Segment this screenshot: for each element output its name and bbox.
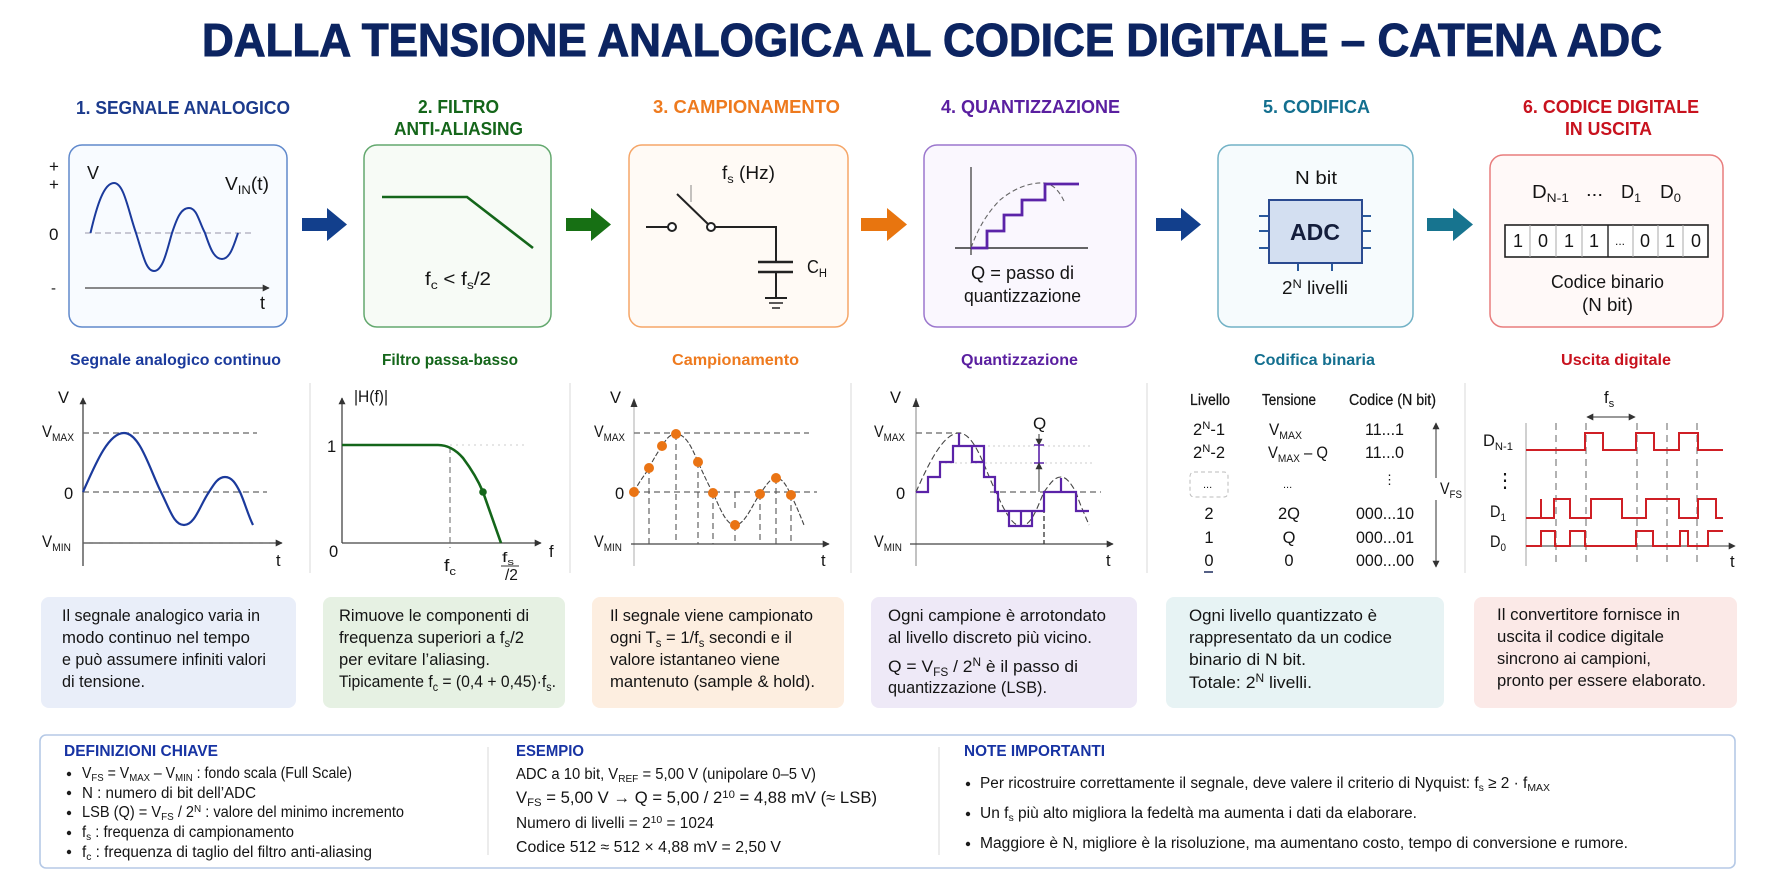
key definitions: f [82,824,86,841]
description box 1: e può assumere infiniti valori [62,650,266,669]
heading: step 2 [394,97,523,139]
key definitions: : frequenza di campionamento [91,824,294,841]
key definitions: – V [150,765,176,782]
panel: analog signal: (t) [251,174,269,194]
description box 1: di tensione. [62,672,145,691]
table: binary coding: -1 [1210,421,1225,439]
description box 4: Q = V [888,657,932,676]
chart: digital output timing: ⋮ [1495,470,1515,492]
table: binary coding [1190,392,1464,572]
chart: continuous analog signal: V [42,533,53,551]
description box 5 [1166,597,1444,708]
binary register: 0 [1640,231,1650,251]
panel: anti-aliasing filter: f [425,269,430,289]
panel: sampling switch: C [807,257,820,277]
arrow 5 [1427,208,1473,241]
example: = 4,88 mV (≈ LSB) [735,789,877,807]
example: ADC a 10 bit, V [516,766,623,783]
chart: sampling: MIN [604,542,622,554]
binary register: 1 [1564,231,1574,251]
panel: sampling switch [629,145,848,327]
example: Codice 512 ≈ 512 × 4,88 mV = 2,50 V [516,839,782,856]
description box 2: s [504,638,510,650]
panel: digital output code: Codice binario [1551,272,1664,292]
chart: sampling: t [821,552,826,570]
important notes: s [1008,812,1014,824]
panel: sampling switch: (Hz) [734,163,775,183]
panel: digital output code: ... [1586,180,1603,200]
table: binary coding: ... [1283,479,1292,491]
arrow 2 [566,208,611,241]
description box 3 [592,597,844,708]
table: binary coding: N [1202,443,1210,455]
chart: sampling: MAX [604,432,625,444]
table: binary coding: ... [1203,479,1212,491]
important notes: Un f [980,805,1008,822]
binary register: 1 [1589,231,1599,251]
description box 2: = (0,4 + 0,45)·f [438,672,547,691]
key definitions: = V [104,765,130,782]
chart: low-pass filter response: f [549,543,554,561]
description box 2: frequenza superiori a f [339,628,508,647]
panel: anti-aliasing filter: < f [438,269,468,289]
table: binary coding: N [1202,420,1210,432]
important notes: Maggiore è N, migliore è la risoluzione, ma aumentano costo, tempo di conversione e rumore. [980,835,1628,852]
description box 6: Il convertitore fornisce in [1497,605,1680,624]
key definitions: : frequenza di taglio del filtro anti-aliasing [91,844,372,861]
description box 2: per evitare l’aliasing. [339,650,490,669]
description box 2: c [433,682,438,694]
panel: analog signal: IN [238,183,251,197]
key definitions: MIN [175,772,193,784]
subheadings [70,352,1671,369]
chart: quantization staircase: V [874,533,885,551]
chart: digital output timing [1483,389,1735,571]
description box 3: ogni T [610,628,657,647]
panel: analog signal: V [225,174,237,194]
chart: continuous analog signal: MIN [52,542,71,554]
panel: digital output code: 1 [1634,191,1641,205]
panel: ADC encoder: N [1293,277,1302,291]
description box 6: sincrono ai campioni, [1497,649,1651,668]
Q step annotation: Q [1033,414,1046,433]
Q step annotation [1033,414,1046,492]
key definitions: FS [91,772,104,784]
panel: bottom reference [40,735,1735,868]
table: binary coding: ⋮ [1383,472,1396,487]
chart: digital output timing: D [1490,533,1502,551]
example: REF [618,773,639,785]
key definitions: N : numero di bit dell’ADC [82,785,256,802]
description box 3: secondi e il [704,628,792,647]
table: binary coding: Q [1283,529,1296,547]
subheadings: Codifica binaria [1254,352,1375,369]
subheadings: Quantizzazione [961,352,1078,369]
chart: digital output timing: 1 [1500,512,1506,524]
digital traces [1526,433,1723,546]
table: binary coding: 000...10 [1356,505,1414,523]
panel: digital output code [1490,155,1723,327]
description box 2: /2 [510,628,524,647]
full-scale range arrow: V [1440,480,1451,498]
arrow 3 [861,208,907,241]
sine wave [90,183,238,271]
key definitions: LSB (Q) = V [82,804,166,821]
panel: anti-aliasing filter [364,145,551,327]
description box 3: s [699,638,705,650]
important notes: più alto migliora la fedeltà ma aumenta i dati da elaborare. [1014,805,1417,822]
description box 4: è il passo di [981,657,1078,676]
example: V [516,789,527,807]
chart: quantization staircase [874,389,1113,570]
chart: sampling: V [610,389,621,407]
description box 1: modo continuo nel tempo [62,628,250,647]
chart: low-pass filter response: 1 [327,438,336,456]
full-scale range arrow: FS [1450,489,1462,501]
table: binary coding: – Q [1300,444,1328,462]
chart: continuous analog signal: t [276,552,281,570]
chart: continuous analog signal: 0 [64,485,73,503]
title: DALLA TENSIONE ANALOGICA AL CODICE DIGITALE – CATENA ADC [202,14,1662,66]
chart: digital output timing: s [1609,398,1615,410]
key definitions: DEFINIZIONI CHIAVE [64,743,218,760]
chart: digital output timing: D [1490,503,1502,521]
description box 4: N [972,657,981,669]
table: binary coding: Tensione [1262,392,1316,409]
binary register: 0 [1691,231,1701,251]
staircase [971,184,1079,248]
description box 3: valore istantaneo viene [610,650,780,669]
binary register: ... [1615,234,1625,248]
chart: low-pass filter response [327,388,554,584]
panel: sampling switch: s [727,172,734,186]
heading: step 2: 2. FILTRO [418,97,499,117]
key definitions [64,743,404,863]
table: binary coding: 000...00 [1356,552,1414,570]
sample and hold circuit [646,185,793,308]
chart: digital output timing: N-1 [1495,441,1513,453]
description box 5: Totale: 2 [1189,673,1253,692]
panel: anti-aliasing filter: /2 [474,269,491,289]
important notes: MAX [1527,782,1550,794]
table: binary coding: V [1268,444,1279,462]
table: binary coding: Livello [1190,392,1230,409]
ADC chip: ADC [1290,219,1340,245]
description box 2: Rimuove le componenti di [339,606,529,625]
key definitions: : valore del minimo incremento [201,804,404,821]
example: 10 [722,789,735,801]
example: = 5,00 V (unipolare 0–5 V) [638,766,816,783]
binary register: 1 [1665,231,1675,251]
panel: sampling switch: f [722,163,727,183]
description box 4: al livello discreto più vicino. [888,628,1092,647]
description box 5: binario di N bit. [1189,650,1306,669]
panel: analog signal: + [49,157,59,176]
important notes: ≥ 2 · f [1484,775,1528,792]
description box 6: pronto per essere elaborato. [1497,671,1706,690]
panel: sampling switch: H [819,266,827,280]
description box 2 [323,597,565,708]
panel: analog signal: 0 [49,225,58,244]
chart: low-pass filter response: f [444,557,449,575]
chart: digital output timing: 0 [1500,542,1506,554]
chart: quantization staircase: t [1106,552,1111,570]
important notes [964,743,1628,852]
chart: continuous analog signal: MAX [52,432,74,444]
example: = 1024 [662,815,714,832]
panel: quantization [924,145,1136,327]
table: binary coding: 2 [1193,444,1202,462]
description box 1 [41,597,296,708]
description box 4: quantizzazione (LSB). [888,678,1047,697]
chart: continuous analog signal [42,389,282,570]
chart: continuous analog signal: V [42,423,53,441]
key definitions: FS [161,811,174,823]
key definitions: c [86,851,91,863]
panel: analog signal: + [49,175,59,194]
panel: digital output code: N-1 [1547,191,1569,205]
table: binary coding: 11...0 [1365,444,1404,462]
table: binary coding: 0 [1204,552,1214,570]
chart: low-pass filter response: f [502,549,506,565]
chart: quantization staircase: MAX [884,432,905,444]
description box 5: N [1255,673,1264,685]
important notes: s [1479,782,1484,794]
example: Numero di livelli = 2 [516,815,652,832]
analog reference curve [916,433,1089,526]
arrow 4 [1156,208,1201,241]
description box 5: Ogni livello quantizzato è [1189,606,1377,625]
chart: digital output timing: t [1730,553,1735,571]
ADC chip [1259,200,1371,271]
description box 6: uscita il codice digitale [1497,627,1664,646]
subheadings: Campionamento [672,352,799,369]
panel: ADC encoder: 2 [1282,278,1292,298]
panel: digital output code: 0 [1674,191,1681,205]
chart: sampling: V [594,533,605,551]
chart: sampling: 0 [615,485,624,503]
key definitions: N [194,803,201,815]
panel: analog signal [49,145,287,327]
panel: anti-aliasing filter: c [431,278,438,292]
description box 5: rappresentato da un codice [1189,628,1392,647]
description box 1: Il segnale analogico varia in [62,606,260,625]
important notes: NOTE IMPORTANTI [964,743,1105,760]
panel: analog signal: V [87,163,99,183]
example: ESEMPIO [516,743,584,760]
panel: analog signal: t [260,293,265,313]
key definitions: MAX [129,772,150,784]
heading: step 5: 5. CODIFICA [1263,97,1370,117]
heading: step 6: 6. CODICE DIGITALE [1523,97,1699,117]
chart: digital output timing: f [1604,389,1609,407]
heading: step 4: 4. QUANTIZZAZIONE [941,97,1120,117]
panel: analog signal: - [51,280,56,297]
sampled curve [634,434,804,525]
chart: quantization staircase: V [890,389,901,407]
description box 4: FS [933,667,949,679]
table: binary coding: 0 [1284,552,1294,570]
table: binary coding: MAX [1279,430,1302,442]
signal curve [83,433,253,525]
panel: digital output code: D [1621,182,1634,202]
panel: anti-aliasing filter: s [467,278,474,292]
heading: step 2: ANTI-ALIASING [394,119,523,139]
chart: sampling [594,389,829,570]
description box 6 [1474,597,1737,708]
panel: quantization: Q = passo di [971,263,1074,283]
description box 2: s [546,682,552,694]
table: binary coding: Codice (N bit) [1349,392,1436,409]
description box 4: / 2 [948,657,972,676]
subheadings: Filtro passa-basso [382,352,518,369]
chart: sampling: V [594,423,605,441]
full-scale range arrow [1432,423,1464,567]
example: FS [527,797,542,809]
heading: step 6 [1523,97,1699,139]
heading: step 3: 3. CAMPIONAMENTO [653,97,840,117]
description box 2: . [552,672,556,691]
description box 2: Tipicamente f [339,672,440,691]
panel: digital output code: (N bit) [1582,295,1633,315]
response curve [342,445,501,543]
description box 3: Il segnale viene campionato [610,606,813,625]
description box 3: mantenuto (sample & hold). [610,672,815,691]
table: binary coding: 000...01 [1356,529,1414,547]
binary register: 0 [1538,231,1548,251]
heading: step 1: 1. SEGNALE ANALOGICO [76,98,290,118]
chart: quantization staircase: MIN [884,542,902,554]
binary register: 1 [1513,231,1523,251]
key definitions: V [82,765,92,782]
panel: ADC encoder: N bit [1295,168,1337,188]
example [516,743,877,856]
heading: step 6: IN USCITA [1565,119,1652,139]
table: binary coding: MAX [1278,453,1300,465]
staircase [916,433,1089,526]
key definitions: / 2 [174,804,194,821]
table: binary coding: 1 [1204,529,1214,547]
description box 4: Ogni campione è arrotondato [888,606,1106,625]
table: binary coding: 2 [1204,505,1214,523]
panel: ADC encoder [1218,145,1413,327]
description box 4 [871,597,1137,708]
table: binary coding: -2 [1210,444,1225,462]
sample points [629,429,796,530]
chart: quantization staircase: V [874,423,885,441]
subheadings: Uscita digitale [1561,352,1671,369]
binary register [1505,225,1708,257]
description box 5: livelli. [1264,673,1312,692]
subheadings: Segnale analogico continuo [70,352,281,369]
key definitions: : fondo scala (Full Scale) [193,765,352,782]
key definitions: s [86,831,91,843]
chart: low-pass filter response: |H(f)| [354,388,388,406]
panel: digital output code: D [1532,182,1545,202]
chart: low-pass filter response: 0 [329,543,338,561]
chart: digital output timing: D [1483,432,1495,450]
description box 3: = 1/f [661,628,699,647]
example: = 5,00 V → Q = 5,00 / 2 [542,789,722,807]
table: binary coding: 11...1 [1365,421,1404,439]
chart: low-pass filter response: c [449,566,456,578]
panel: digital output code: D [1660,182,1673,202]
chart: continuous analog signal: V [58,389,69,407]
table: binary coding: 2Q [1278,505,1300,523]
arrow 1 [302,208,347,241]
step headings [76,97,1699,139]
panel: quantization: quantizzazione [964,286,1081,306]
chart: low-pass filter response: /2 [505,567,518,584]
example: 10 [651,814,662,826]
chart: quantization staircase: 0 [896,485,905,503]
table: binary coding: 2 [1193,421,1202,439]
description box 3: s [656,638,662,650]
table: binary coding: V [1269,421,1280,439]
panel: ADC encoder: livelli [1302,278,1348,298]
chart: low-pass filter response: s [507,557,514,568]
key definitions: f [82,844,86,861]
important notes: Per ricostruire correttamente il segnale, deve valere il criterio di Nyquist: f [980,775,1482,792]
